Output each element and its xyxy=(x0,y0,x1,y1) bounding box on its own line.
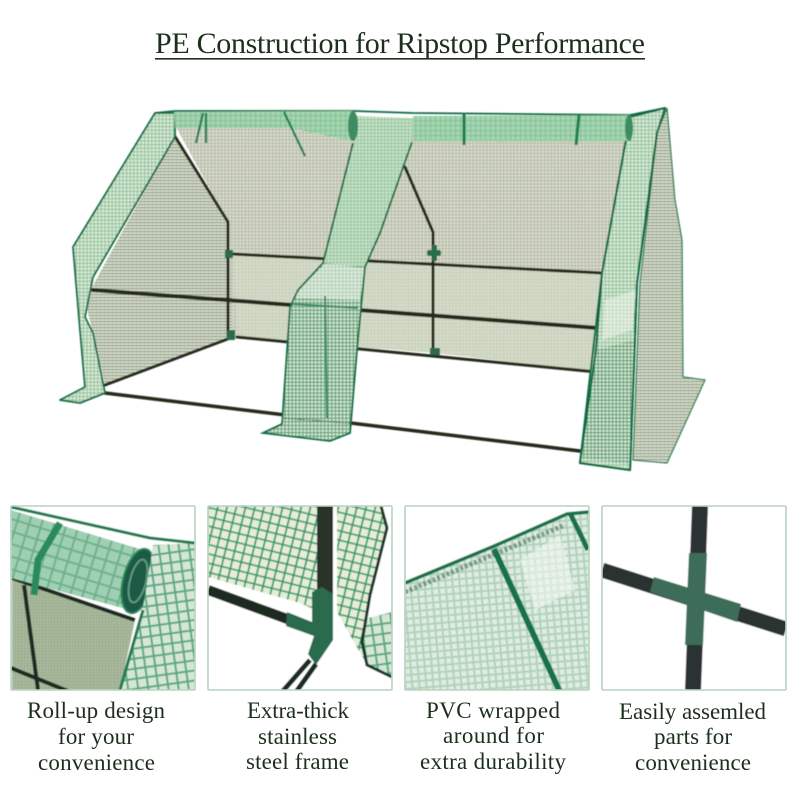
caption: roll-up design: Roll-up design xyxy=(27,698,166,723)
caption: steel frame: steel frame xyxy=(246,749,349,774)
corner connector xyxy=(286,587,333,665)
frame connectors xyxy=(225,245,441,355)
rolled mesh xyxy=(12,510,140,609)
left side wall xyxy=(85,135,233,385)
centre front flap xyxy=(263,116,413,441)
caption: connector parts: Easily assemled xyxy=(619,699,766,724)
caption: PVC wrap: extra durability xyxy=(420,749,566,774)
photo panel: PVC wrap xyxy=(405,506,589,692)
photo panel: roll-up design xyxy=(11,506,195,692)
glare xyxy=(520,535,575,610)
steel pole xyxy=(317,506,333,598)
main photo: mesh greenhouse xyxy=(60,108,705,470)
four-way connector xyxy=(685,553,707,645)
steel frame xyxy=(93,135,603,452)
top binding xyxy=(405,512,589,583)
flap edge xyxy=(362,506,392,677)
caption: PVC wrap xyxy=(420,698,566,774)
corner seam xyxy=(570,513,588,550)
title: PE Construction for Ripstop Performance xyxy=(155,27,645,60)
left front flap xyxy=(60,113,175,403)
open flap xyxy=(120,543,195,690)
rolled window left xyxy=(174,111,358,156)
dark grid edge xyxy=(405,525,565,592)
panel frames xyxy=(11,506,786,690)
caption: roll-up design: convenience xyxy=(38,750,155,775)
caption: connector parts xyxy=(619,699,766,775)
back mesh wall xyxy=(175,118,628,372)
rolled window right xyxy=(413,113,633,145)
mesh wall xyxy=(208,506,320,612)
caption: PVC wrap: around for xyxy=(443,723,544,748)
caption: connector parts: convenience xyxy=(635,750,751,775)
lower back wall tint xyxy=(233,250,602,372)
caption: roll-up design: for your xyxy=(58,724,134,749)
tie strap xyxy=(34,523,60,595)
caption: PVC wrap: PVC wrapped xyxy=(426,698,560,723)
foot flap xyxy=(362,612,392,677)
roof ridge edge xyxy=(155,108,665,115)
roll end swirl xyxy=(126,558,149,604)
roll end xyxy=(120,547,152,615)
photo panel: steel frame xyxy=(208,506,392,692)
right front flap xyxy=(580,108,665,470)
caption: steel frame: Extra-thick xyxy=(247,698,350,723)
photo panel: connector parts xyxy=(602,506,786,690)
top binding xyxy=(11,507,195,543)
caption: steel frame: stainless xyxy=(258,724,337,749)
back wall xyxy=(12,578,135,690)
caption: roll-up design xyxy=(27,698,166,775)
caption: steel frame xyxy=(246,698,350,774)
right side wall with foot flap xyxy=(633,108,705,463)
caption: connector parts: parts for xyxy=(654,724,732,749)
binding strip xyxy=(494,549,560,692)
